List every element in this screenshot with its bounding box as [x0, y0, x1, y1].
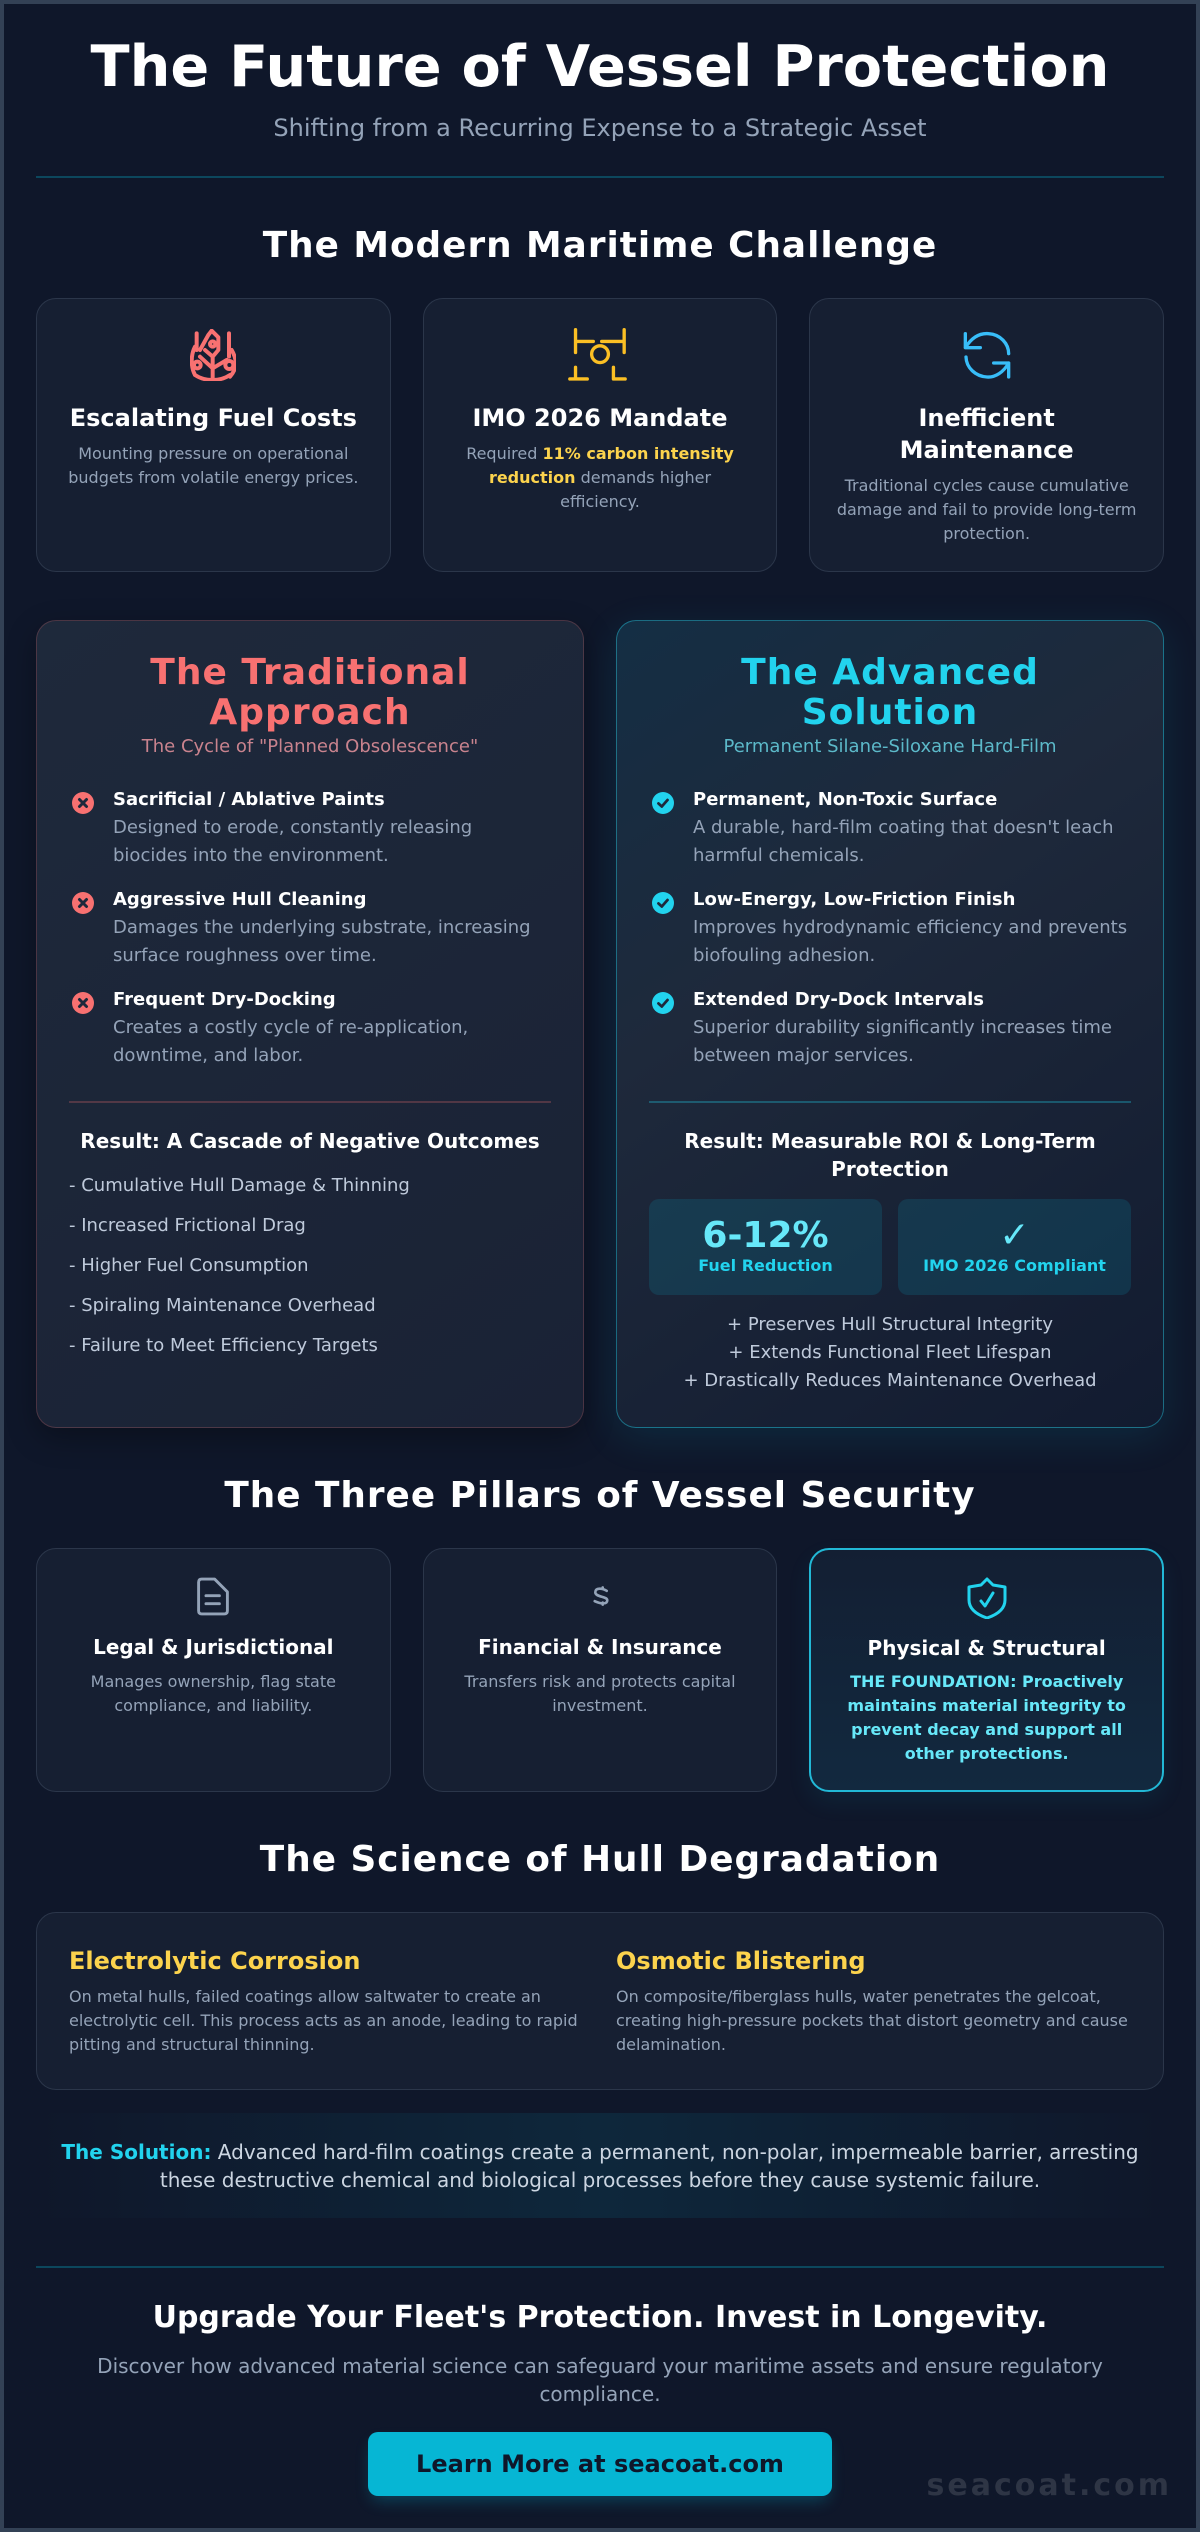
card text: budgets from volatile energy prices. [68, 468, 358, 487]
item text [693, 917, 1127, 966]
item text: Superior durability significantly increases time [693, 1017, 1112, 1038]
button [368, 2432, 832, 2496]
card text: Traditional cycles cause cumulative [845, 476, 1129, 495]
icon: check [652, 892, 674, 914]
card text [466, 444, 734, 511]
pillar text: THE FOUNDATION: Proactively [850, 1672, 1123, 1691]
negative outcomes list: - Cumulative Hull Damage & Thinning [69, 1175, 410, 1196]
subtitle: Shifting from a Recurring Expense to a Strategic Asset [273, 114, 927, 142]
item title: Aggressive Hull Cleaning [113, 889, 366, 910]
negative outcomes list: - Failure to Meet Efficiency Targets [69, 1335, 378, 1356]
column text: delamination. [616, 2035, 726, 2054]
callout: the solution [36, 2113, 1164, 2218]
item text [693, 817, 1114, 866]
positive outcomes list: + Drastically Reduces Maintenance Overhead [683, 1370, 1097, 1391]
pillar text: investment. [552, 1696, 648, 1715]
pillar text [464, 1672, 736, 1715]
card title: Maintenance [900, 436, 1074, 464]
list item: hull cleaning [72, 889, 531, 966]
pillar text: prevent decay and support all [851, 1720, 1122, 1739]
panel heading [741, 652, 1039, 733]
item text: surface roughness over time. [113, 945, 377, 966]
column text [616, 1985, 1128, 2057]
result heading: Result: A Cascade of Negative Outcomes [80, 1129, 540, 1153]
pillar title: Physical & Structural [868, 1636, 1106, 1660]
section heading: challenge: The Modern Maritime Challenge [263, 225, 937, 266]
item title: Low-Energy, Low-Friction Finish [693, 889, 1015, 910]
panel subheading: The Cycle of "Planned Obsolescence" [142, 736, 478, 757]
stat label: IMO 2026 Compliant [923, 1256, 1106, 1275]
card: financial pillar [423, 1548, 777, 1792]
column heading: Osmotic Blistering [616, 1947, 866, 1975]
pillar text [91, 1672, 336, 1715]
column text: creating high-pressure pockets that distort geometry and cause [616, 2011, 1128, 2030]
card text: Mounting pressure on operational [78, 444, 348, 463]
card text [837, 476, 1136, 543]
icon: check [652, 792, 674, 814]
negative outcomes list: - Spiraling Maintenance Overhead [69, 1295, 376, 1316]
stat: fuel reduction [649, 1199, 882, 1295]
corrosion column [69, 1947, 578, 2054]
item text [113, 1017, 468, 1066]
pillar text: Manages ownership, flag state [91, 1672, 336, 1691]
icon: refresh cycle [964, 332, 1010, 379]
item text [693, 1017, 1112, 1066]
item text: Designed to erode, constantly releasing [113, 817, 472, 838]
watermark: seacoat.com [927, 2468, 1172, 2503]
item title: Frequent Dry-Docking [113, 989, 336, 1010]
header [90, 33, 1109, 142]
card: physical pillar [809, 1548, 1164, 1792]
section heading: science: The Science of Hull Degradation [260, 1839, 940, 1880]
pillar text: maintains material integrity to [847, 1696, 1126, 1715]
title: The Future of Vessel Protection [90, 33, 1109, 100]
stat: compliance [898, 1199, 1131, 1295]
panel: advanced solution [616, 620, 1164, 1428]
list item: dry-dock intervals [652, 989, 1112, 1066]
stat value: ✓ [999, 1215, 1030, 1256]
card: IMO mandate [423, 298, 777, 572]
panel heading: Solution [802, 692, 978, 733]
item text [113, 817, 472, 866]
button: Learn More at seacoat.com [416, 2450, 784, 2478]
panel heading: The Traditional [150, 652, 470, 693]
pillar title: Legal & Jurisdictional [93, 1635, 334, 1659]
card text [68, 444, 358, 487]
pillar text: compliance, and liability. [114, 1696, 312, 1715]
callout text: these destructive chemical and biological processes before they cause systemic failure. [160, 2168, 1040, 2192]
column text [69, 1987, 578, 2054]
item text [113, 917, 531, 966]
positive outcomes list: + Extends Functional Fleet Lifespan [728, 1342, 1052, 1363]
panel heading: Approach [209, 692, 411, 733]
callout text [36, 2138, 1164, 2194]
card text: efficiency. [560, 492, 640, 511]
blistering column [616, 1947, 1128, 2054]
icon: flame and anchor [190, 329, 236, 381]
icon: dollar [593, 1586, 609, 1606]
column text: On composite/fiberglass hulls, water penetrates the gelcoat, [616, 1987, 1101, 2006]
result heading [684, 1129, 1096, 1181]
card title: IMO 2026 Mandate [472, 404, 727, 432]
panel subheading: Permanent Silane-Siloxane Hard-Film [724, 736, 1056, 757]
card title: Inefficient [918, 404, 1055, 432]
icon: check [652, 992, 674, 1014]
item text: biofouling adhesion. [693, 945, 875, 966]
item text: A durable, hard-film coating that doesn't leach [693, 817, 1114, 838]
card title: Escalating Fuel Costs [70, 404, 357, 432]
pillar title: Financial & Insurance [478, 1635, 722, 1659]
item title: Permanent, Non-Toxic Surface [693, 789, 997, 810]
stat value: 6-12% [702, 1215, 829, 1256]
section heading: pillars: The Three Pillars of Vessel Security [224, 1475, 976, 1516]
card text: reduction demands higher [489, 468, 711, 487]
icon: cross [72, 992, 94, 1014]
negative outcomes list [69, 1175, 410, 1356]
item text: downtime, and labor. [113, 1045, 303, 1066]
panel: traditional approach [36, 620, 584, 1428]
icon: document [197, 1578, 229, 1616]
pillar text [847, 1672, 1126, 1763]
card: legal pillar [36, 1548, 391, 1792]
icon: cross [72, 892, 94, 914]
negative outcomes list: - Higher Fuel Consumption [69, 1255, 309, 1276]
call to action text [0, 2352, 1200, 2408]
card: maintenance [809, 298, 1164, 572]
panel heading [150, 652, 470, 733]
pillar text: Transfers risk and protects capital [464, 1672, 736, 1691]
item title: Sacrificial / Ablative Paints [113, 789, 385, 810]
panel: hull degradation science [36, 1912, 1164, 2090]
call to action text: compliance. [539, 2382, 661, 2406]
item text: Creates a costly cycle of re-application, [113, 1017, 468, 1038]
list item: permanent surface [652, 789, 1114, 866]
item text: harmful chemicals. [693, 845, 864, 866]
card text: damage and fail to provide long-term [837, 500, 1136, 519]
card text: protection. [943, 524, 1030, 543]
column text: On metal hulls, failed coatings allow saltwater to create an [69, 1987, 541, 2006]
call to action heading: Upgrade Your Fleet's Protection. Invest in Longevity. [153, 2300, 1047, 2335]
result heading: Protection [831, 1157, 949, 1181]
list item: dry-docking [72, 989, 468, 1066]
list item: ablative paints [72, 789, 472, 866]
negative outcomes list: - Increased Frictional Drag [69, 1215, 306, 1236]
card text: Required 11% carbon intensity [466, 444, 734, 463]
item text: biocides into the environment. [113, 845, 389, 866]
positive outcomes list [683, 1314, 1097, 1391]
icon: regulation target [568, 328, 627, 381]
result heading: Result: Measurable ROI & Long-Term [684, 1129, 1096, 1153]
item text: between major services. [693, 1045, 914, 1066]
list item: low friction [652, 889, 1127, 966]
item title: Extended Dry-Dock Intervals [693, 989, 984, 1010]
column heading: Electrolytic Corrosion [69, 1947, 360, 1975]
panel heading: The Advanced [741, 652, 1039, 693]
item text: Damages the underlying substrate, increasing [113, 917, 531, 938]
positive outcomes list: + Preserves Hull Structural Integrity [727, 1314, 1053, 1335]
column text: pitting and structural thinning. [69, 2035, 315, 2054]
card: fuel costs [36, 298, 391, 572]
column text: electrolytic cell. This process acts as an anode, leading to rapid [69, 2011, 578, 2030]
item text: Improves hydrodynamic efficiency and prevents [693, 917, 1127, 938]
icon: cross [72, 792, 94, 814]
stat label: Fuel Reduction [698, 1256, 833, 1275]
call to action text: Discover how advanced material science can safeguard your maritime assets and ensure regulatory [97, 2354, 1103, 2378]
callout text: The Solution: Advanced hard-film coatings create a permanent, non-polar, impermeable barrier, arresting [61, 2140, 1139, 2164]
pillar text: other protections. [905, 1744, 1069, 1763]
card title [900, 404, 1074, 464]
icon: shield check [968, 1577, 1006, 1619]
